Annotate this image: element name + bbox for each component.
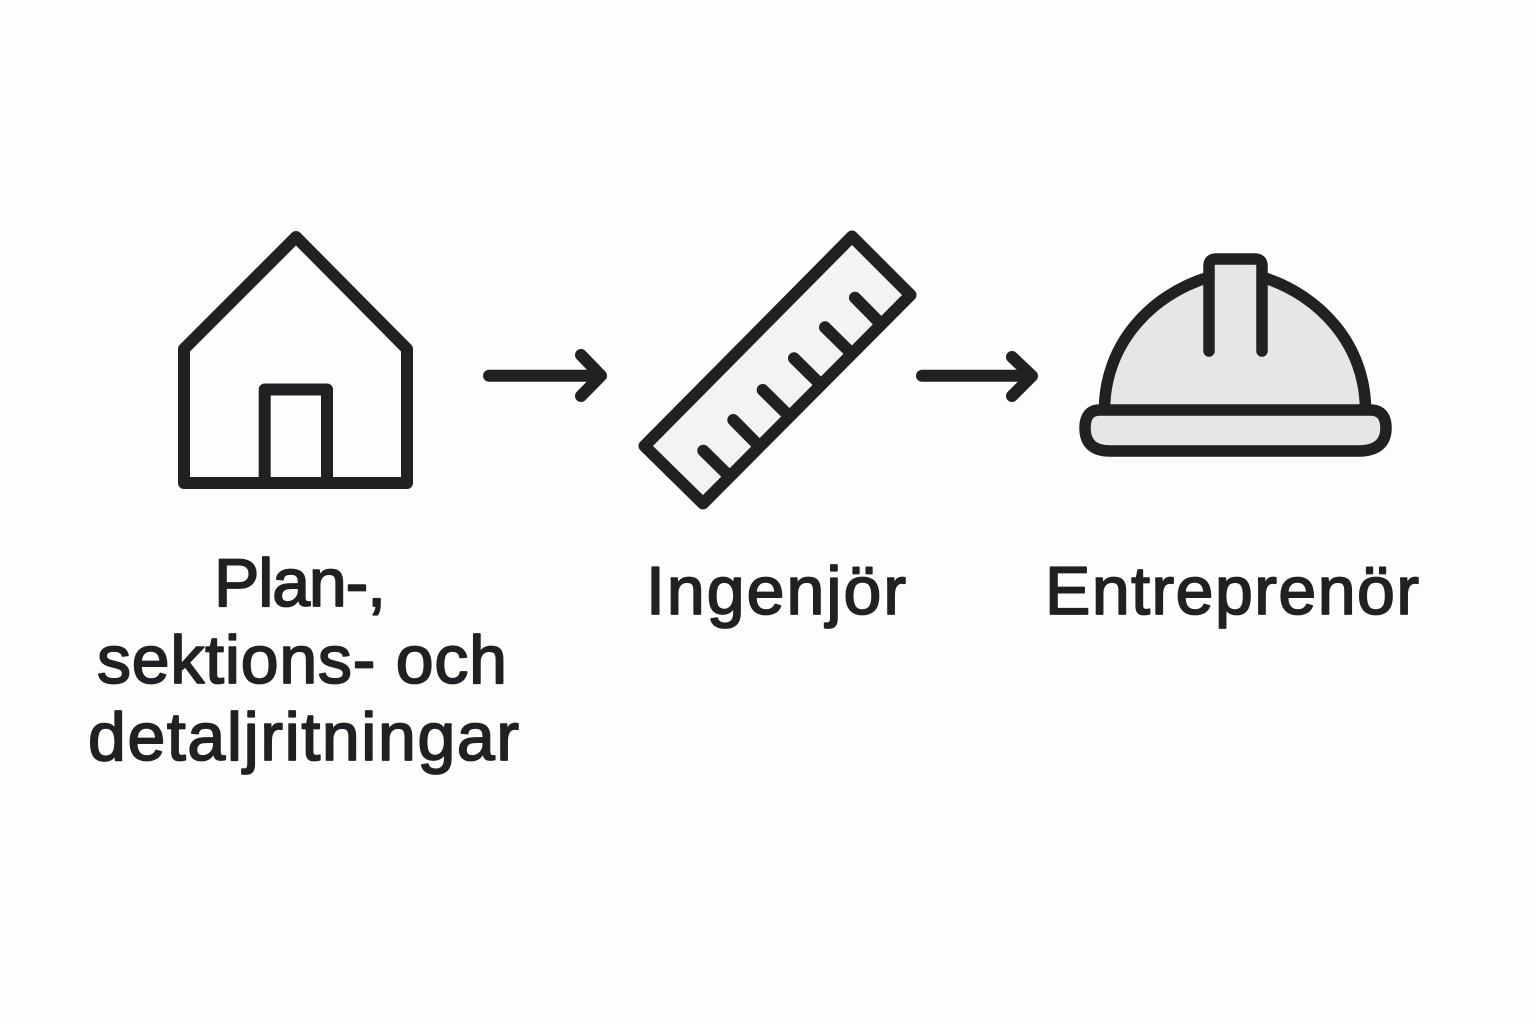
label: plans [88, 545, 519, 775]
label: plans: detaljritningar [88, 699, 519, 775]
label: plans: Plan-, [214, 545, 386, 621]
arrow: engineer to contractor [922, 357, 1032, 396]
label: plans: sektions- och [97, 622, 507, 698]
label: engineer: Ingenjör [646, 553, 906, 629]
icon: hard hat [1085, 259, 1386, 451]
label: contractor: Entreprenör [1045, 553, 1419, 629]
icon: ruler [644, 236, 910, 504]
arrow: plans to engineer [489, 355, 601, 396]
icon: house [184, 237, 407, 483]
